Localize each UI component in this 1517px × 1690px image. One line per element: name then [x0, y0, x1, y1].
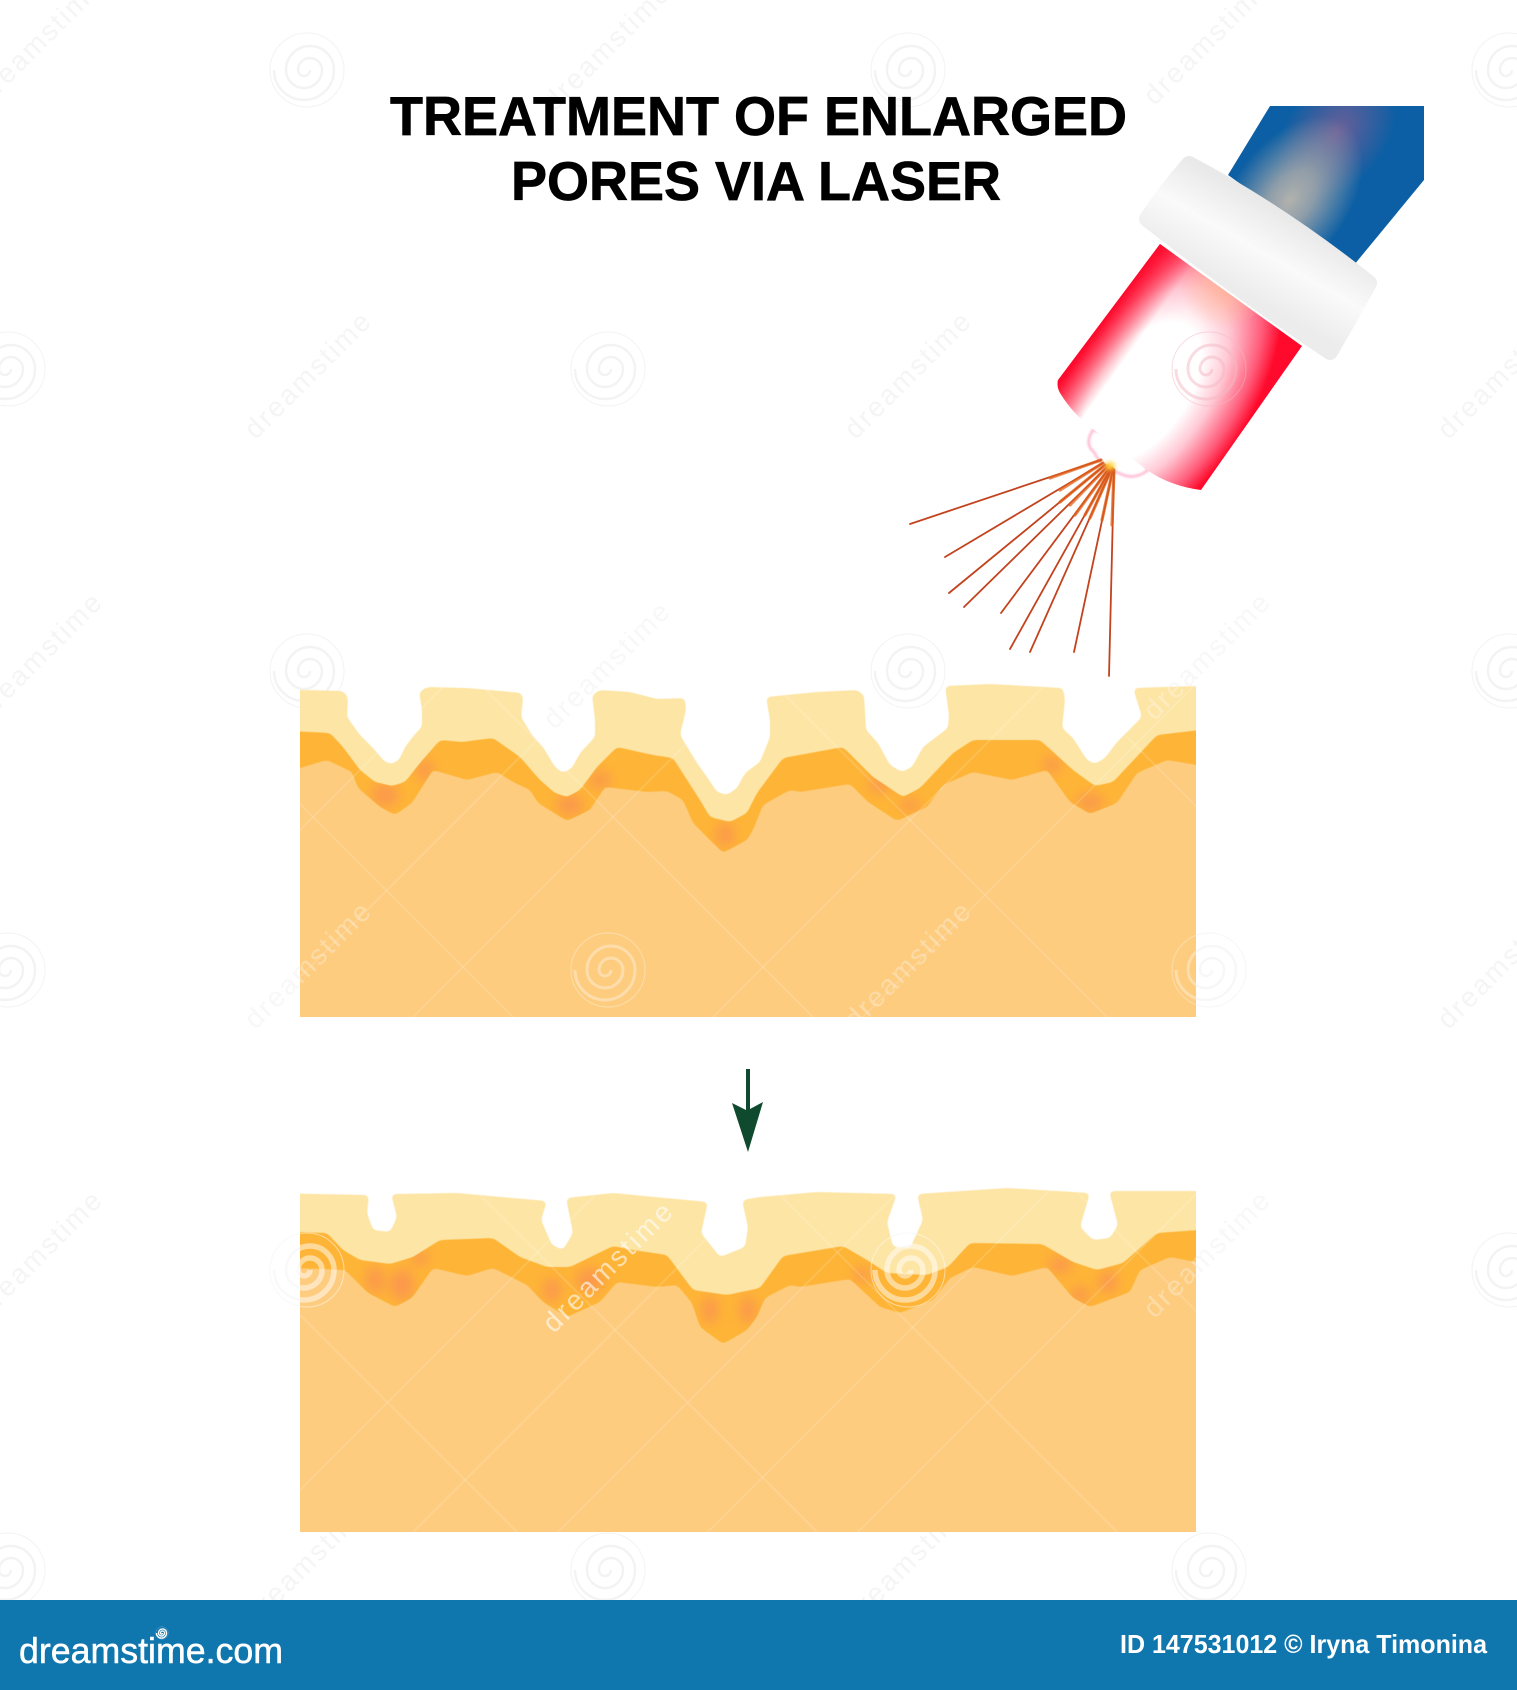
watermark text under artwork: dreamstime — [838, 1492, 977, 1631]
blue handle — [1228, 106, 1424, 265]
watermark text under artwork: dreamstime — [1137, 587, 1276, 726]
watermark text under artwork: dreamstime — [238, 1492, 377, 1631]
watermark spirals strong over lower panel — [270, 1233, 945, 1307]
nozzle tip glow — [1089, 430, 1148, 476]
red nozzle with white glow — [1058, 244, 1302, 490]
watermark spirals over artwork — [571, 933, 1246, 1007]
epidermis layer, enlarged pores — [300, 684, 1196, 822]
white collar — [1147, 164, 1369, 352]
watermark text over panels — [238, 587, 1276, 1338]
watermark text over panels: dreamstime — [536, 1196, 678, 1338]
footer credit: ID 147531012 © Iryna Timonina — [1120, 1629, 1488, 1659]
laser rays — [910, 460, 1115, 676]
watermark text over panels: dreamstime — [838, 896, 977, 1035]
watermark text over panels: dreamstime — [1137, 1185, 1276, 1324]
title: PORES VIA LASER — [511, 150, 1001, 212]
dermis layer — [300, 760, 1196, 1017]
laser device — [910, 106, 1424, 676]
watermark text under artwork: dreamstime — [1137, 1185, 1276, 1324]
title: TREATMENT OF ENLARGED — [390, 85, 1127, 147]
watermark lines — [300, 1190, 1196, 1532]
watermark text over panels: dreamstime — [238, 896, 377, 1035]
watermark text under artwork: dreamstime — [238, 896, 377, 1035]
footer logo: dreamstime.com — [19, 1630, 283, 1671]
epidermis layer, narrowed pores — [300, 1188, 1196, 1295]
watermark lines — [300, 686, 1196, 1017]
title — [390, 85, 1127, 212]
arrow: before to after — [732, 1069, 763, 1152]
watermark text under artwork: dreamstime — [537, 596, 676, 735]
watermark text over panels: dreamstime — [1137, 587, 1276, 726]
watermark spiral over nozzle — [1172, 332, 1246, 406]
dermis layer — [300, 1257, 1196, 1532]
panel: skin cross-section after laser treatment — [300, 1188, 1196, 1532]
orange sublayer — [300, 1230, 1196, 1344]
watermark text under artwork: dreamstime — [238, 306, 377, 445]
footer bar — [0, 1600, 1517, 1690]
panel: skin cross-section with enlarged pores — [300, 684, 1196, 1017]
watermark text under artwork: dreamstime — [838, 306, 977, 445]
orange sublayer — [300, 730, 1196, 852]
reddish pore-base tint — [371, 756, 1104, 847]
watermark text over panels: dreamstime — [537, 596, 676, 735]
reddish pore-base tint — [366, 1251, 1117, 1324]
